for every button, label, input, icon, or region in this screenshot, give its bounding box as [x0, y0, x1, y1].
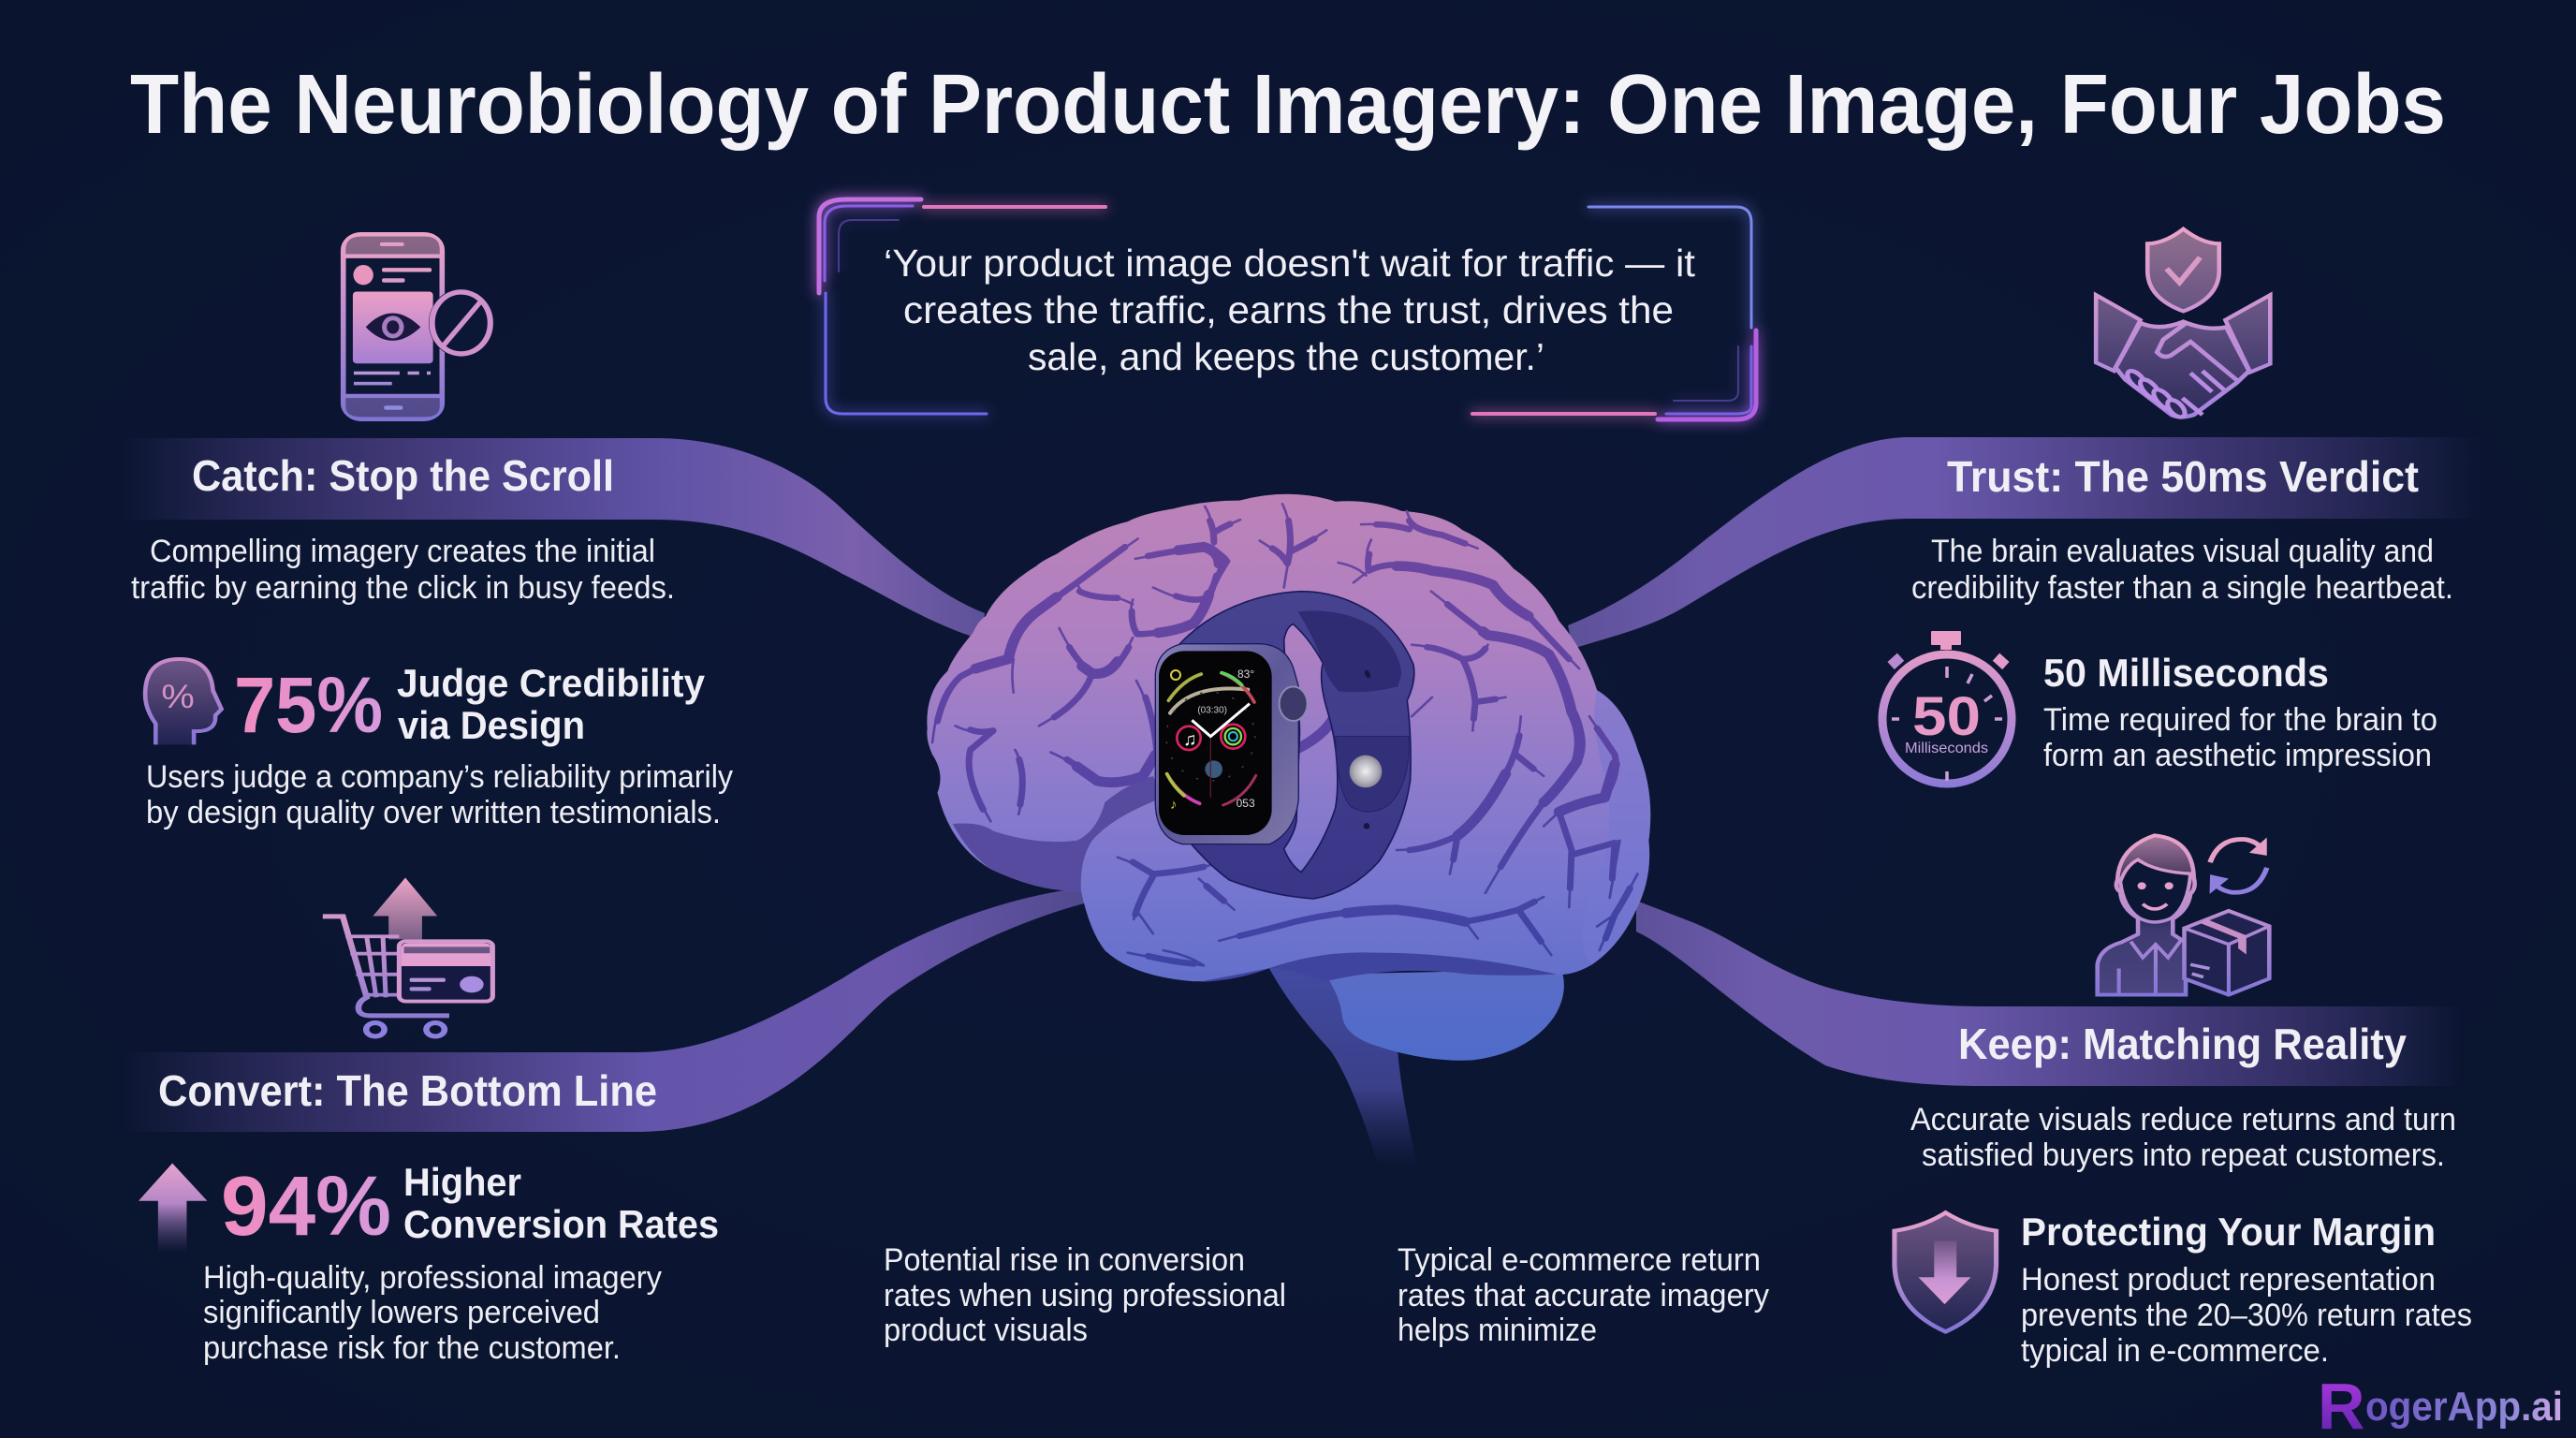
- icon: stopwatch: 50: [1912, 686, 1981, 747]
- strap loop and tab: [1298, 610, 1409, 829]
- panel: keep: [1636, 835, 2472, 1369]
- stat: 75%: [145, 659, 733, 830]
- stat description: Time required for the brain to: [2043, 702, 2437, 738]
- ribbon band: [1568, 437, 2481, 649]
- sulci: [932, 504, 1637, 965]
- panel: trust: [1568, 229, 2481, 784]
- icon: stopwatch: Milliseconds: [1905, 741, 1988, 756]
- logo: [2318, 1370, 2563, 1438]
- watch strap: [1170, 592, 1414, 899]
- stat label: [403, 1160, 719, 1246]
- brain stem: [1267, 964, 1418, 1167]
- watch screen: [1159, 651, 1272, 835]
- description: [1910, 1102, 2456, 1173]
- heading: Catch: Stop the Scroll: [192, 451, 614, 500]
- stat description: [2043, 702, 2437, 773]
- stat description: prevents the 20–30% return rates: [2021, 1298, 2472, 1333]
- icon: shield over handshake: [2096, 229, 2270, 419]
- stat label: Conversion Rates: [403, 1202, 719, 1246]
- under-temporal fold: [1199, 952, 1557, 982]
- ribbon band: [122, 888, 1084, 1132]
- stat label: [397, 661, 706, 747]
- stat: 94%: [139, 1160, 719, 1366]
- center note: return rates: rates that accurate imagery: [1398, 1278, 1769, 1313]
- stat description: Honest product representation: [2021, 1262, 2436, 1298]
- stat: protecting margin: [1895, 1210, 2472, 1369]
- cerebellum: [1325, 970, 1564, 1061]
- panel: convert: [122, 878, 1084, 1366]
- stat label: Judge Credibility: [397, 661, 706, 705]
- heading: Keep: Matching Reality: [1958, 1020, 2407, 1068]
- stat description: High-quality, professional imagery: [203, 1260, 662, 1296]
- quote frame: [819, 199, 1756, 419]
- shaded lower lobe edge: [953, 776, 1164, 891]
- description: credibility faster than a single heartbeat.: [1911, 570, 2453, 606]
- stat description: [146, 759, 733, 830]
- icon: up arrow: [139, 1164, 207, 1253]
- quote text: [884, 242, 1696, 378]
- cerebrum: [927, 494, 1650, 981]
- description: Accurate visuals reduce returns and turn: [1910, 1102, 2456, 1137]
- watch screen: ♫: [1183, 730, 1196, 750]
- center note: conversion rise: Potential rise in conversion: [884, 1242, 1245, 1278]
- quote callout: [819, 199, 1756, 419]
- stat number: 94%: [221, 1160, 391, 1254]
- description: [131, 534, 675, 606]
- stat description: typical in e-commerce.: [2021, 1333, 2329, 1369]
- occipital lobe tint: [1582, 690, 1650, 964]
- heading: Convert: The Bottom Line: [158, 1066, 657, 1115]
- stat label: via Design: [398, 703, 585, 747]
- description: [1911, 534, 2453, 606]
- icon: shield with down arrow: [1895, 1212, 1997, 1331]
- watch case: [1155, 644, 1298, 844]
- center note: return rates: helps minimize: [1398, 1313, 1597, 1348]
- description: satisfied buyers into repeat customers.: [1922, 1137, 2445, 1173]
- description: Compelling imagery creates the initial: [150, 534, 655, 569]
- center note: return rates: Typical e-commerce return: [1398, 1242, 1761, 1278]
- quote text: ‘Your product image doesn't wait for traffic — it: [884, 242, 1696, 285]
- stat label: 50 Milliseconds: [2043, 651, 2329, 695]
- icon: cart, card and up arrow: [323, 878, 492, 1036]
- description: traffic by earning the click in busy feeds.: [131, 570, 675, 606]
- title: The Neurobiology of Product Imagery: One Image, Four Jobs: [130, 58, 2446, 152]
- stat label: Higher: [403, 1160, 521, 1204]
- icon: head with percent: %: [161, 679, 195, 715]
- center note: conversion rise: product visuals: [884, 1313, 1088, 1348]
- icon: customer, box and return arrows: [2098, 835, 2269, 995]
- watch screen: ♪: [1170, 798, 1177, 813]
- panel: catch: [122, 234, 985, 830]
- stat label: Protecting Your Margin: [2021, 1210, 2436, 1254]
- watch screen: 053: [1237, 797, 1255, 810]
- quote text: creates the traffic, earns the trust, drives the: [903, 288, 1674, 331]
- description: The brain evaluates visual quality and: [1931, 534, 2434, 569]
- quote text: sale, and keeps the customer.’: [1028, 335, 1544, 378]
- stat number: 75%: [234, 661, 383, 749]
- icon: head with percent: [145, 659, 222, 744]
- logo: ogerApp.ai: [2365, 1384, 2563, 1430]
- center note: return rates: [1398, 1242, 1769, 1348]
- smartwatch: [1155, 592, 1414, 899]
- stat description: form an aesthetic impression: [2043, 738, 2432, 773]
- stat description: by design quality over written testimonials.: [146, 795, 721, 830]
- stat description: [2021, 1262, 2472, 1369]
- icon: stopwatch: [1882, 631, 2012, 784]
- watch screen: (03:30): [1197, 705, 1227, 715]
- brain illustration: [927, 494, 1650, 1167]
- center note: conversion rise: rates when using professional: [884, 1278, 1286, 1313]
- stat description: [203, 1260, 662, 1366]
- watch screen: 83°: [1237, 668, 1254, 681]
- center note: conversion rise: [884, 1242, 1286, 1348]
- stat description: purchase risk for the customer.: [203, 1330, 621, 1366]
- icon: phone with eye and block sign: [344, 234, 493, 419]
- stat description: Users judge a company’s reliability primarily: [146, 759, 733, 795]
- ribbon band: [1636, 901, 2462, 1086]
- stat: 50 milliseconds: [1882, 631, 2437, 784]
- stat description: significantly lowers perceived: [203, 1295, 600, 1330]
- heading: Trust: The 50ms Verdict: [1947, 452, 2419, 501]
- ribbon band: [122, 438, 985, 639]
